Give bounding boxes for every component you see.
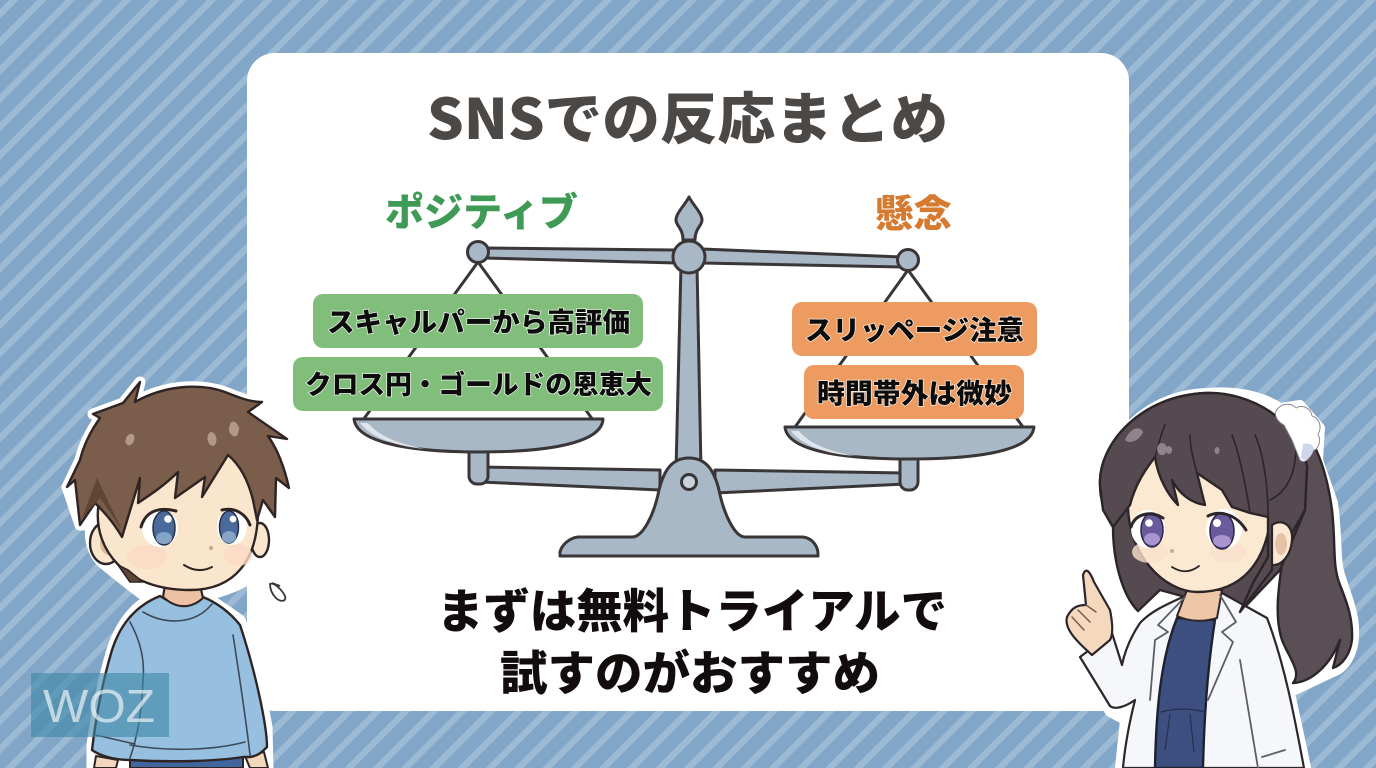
girl scrunchie shade <box>1301 443 1314 460</box>
girl coat <box>1080 593 1304 768</box>
boy left ear <box>90 522 122 564</box>
girl lapels <box>1150 595 1285 768</box>
boy sideburn <box>118 565 143 582</box>
upper beam <box>484 248 902 267</box>
character: boy <box>67 382 289 768</box>
boy pants <box>130 752 243 768</box>
central hub <box>673 241 705 273</box>
girl left eye <box>1131 510 1165 548</box>
girl white outline <box>1064 392 1354 768</box>
right beam ball <box>898 250 918 270</box>
title: SNSでの反応まとめ <box>427 75 948 156</box>
watermark: WOZ <box>43 680 155 732</box>
positive pill 2: クロス円・ゴールドの恩恵大 <box>305 363 652 402</box>
girl scrunchie <box>1275 404 1320 462</box>
post <box>676 265 701 470</box>
girl mouth <box>1172 566 1199 571</box>
heading: positive: ポジティブ <box>385 182 578 238</box>
girl ear <box>1272 522 1292 565</box>
left beam ball <box>468 242 488 262</box>
girl nose <box>1170 549 1174 553</box>
girl blush <box>1132 541 1168 563</box>
concern pill 2 <box>804 365 1024 419</box>
girl ear inner <box>1275 533 1287 555</box>
girl neck <box>1177 590 1222 621</box>
right pan <box>785 427 1034 459</box>
boy left eye <box>141 509 178 547</box>
girl face <box>1128 445 1272 592</box>
girl hand <box>1067 571 1112 655</box>
boy blush right <box>224 544 252 566</box>
left pan strings <box>363 262 593 420</box>
balance scale <box>354 197 1034 556</box>
base pivot <box>682 474 696 490</box>
boy mouth <box>184 565 212 570</box>
panel: white card <box>247 53 1129 711</box>
boy blush <box>127 545 167 569</box>
left pan <box>354 419 603 452</box>
concern pill 1: スリッページ注意 <box>805 309 1024 348</box>
concern pill 2: 時間帯外は微妙 <box>817 371 1013 411</box>
girl finger lines <box>1072 605 1096 630</box>
left pan stem <box>469 445 488 484</box>
conclusion text <box>437 573 947 704</box>
boy hair <box>67 382 289 537</box>
concern pill 1 <box>792 302 1037 356</box>
girl hair cap <box>1100 393 1307 612</box>
finial <box>676 197 702 240</box>
positive pill 2 <box>293 357 663 411</box>
watermark <box>31 673 169 737</box>
right pan highlight <box>791 431 856 456</box>
boy right eye <box>217 509 250 545</box>
right pan stem <box>900 452 918 490</box>
lower beam <box>480 467 906 493</box>
girl dress <box>1155 618 1215 768</box>
positive pill 1 <box>313 294 643 348</box>
boy right ear <box>251 523 269 557</box>
boy face <box>98 440 258 590</box>
heading: concerns: 懸念 <box>875 183 952 238</box>
boy left ear inner <box>100 533 118 555</box>
base <box>560 458 818 556</box>
boy hair shadow <box>82 478 122 530</box>
boy white outline <box>67 382 289 768</box>
girl hair lines <box>1155 425 1296 517</box>
character: girl <box>1064 392 1354 768</box>
boy hair highlights <box>125 422 239 446</box>
girl dress waist <box>1161 709 1205 752</box>
icon: sweat mark <box>270 583 285 601</box>
girl right eye <box>1206 509 1246 549</box>
girl hair highlights <box>1125 428 1220 455</box>
boy neck <box>163 585 203 606</box>
girl back hair <box>1100 393 1307 612</box>
boy hands <box>94 752 268 768</box>
boy nose <box>209 546 213 550</box>
left pan highlight <box>360 423 425 449</box>
positive pill 1: スキャルパーから高評価 <box>327 301 630 340</box>
girl ponytail <box>1278 430 1352 683</box>
conclusion text: まずは無料トライアルで <box>437 573 947 642</box>
boy sweater <box>92 596 267 761</box>
conclusion text: 試すのがおすすめ <box>500 635 880 704</box>
right pan strings <box>795 270 1023 427</box>
boy sweater details <box>95 604 250 758</box>
girl blush right <box>1210 541 1246 563</box>
